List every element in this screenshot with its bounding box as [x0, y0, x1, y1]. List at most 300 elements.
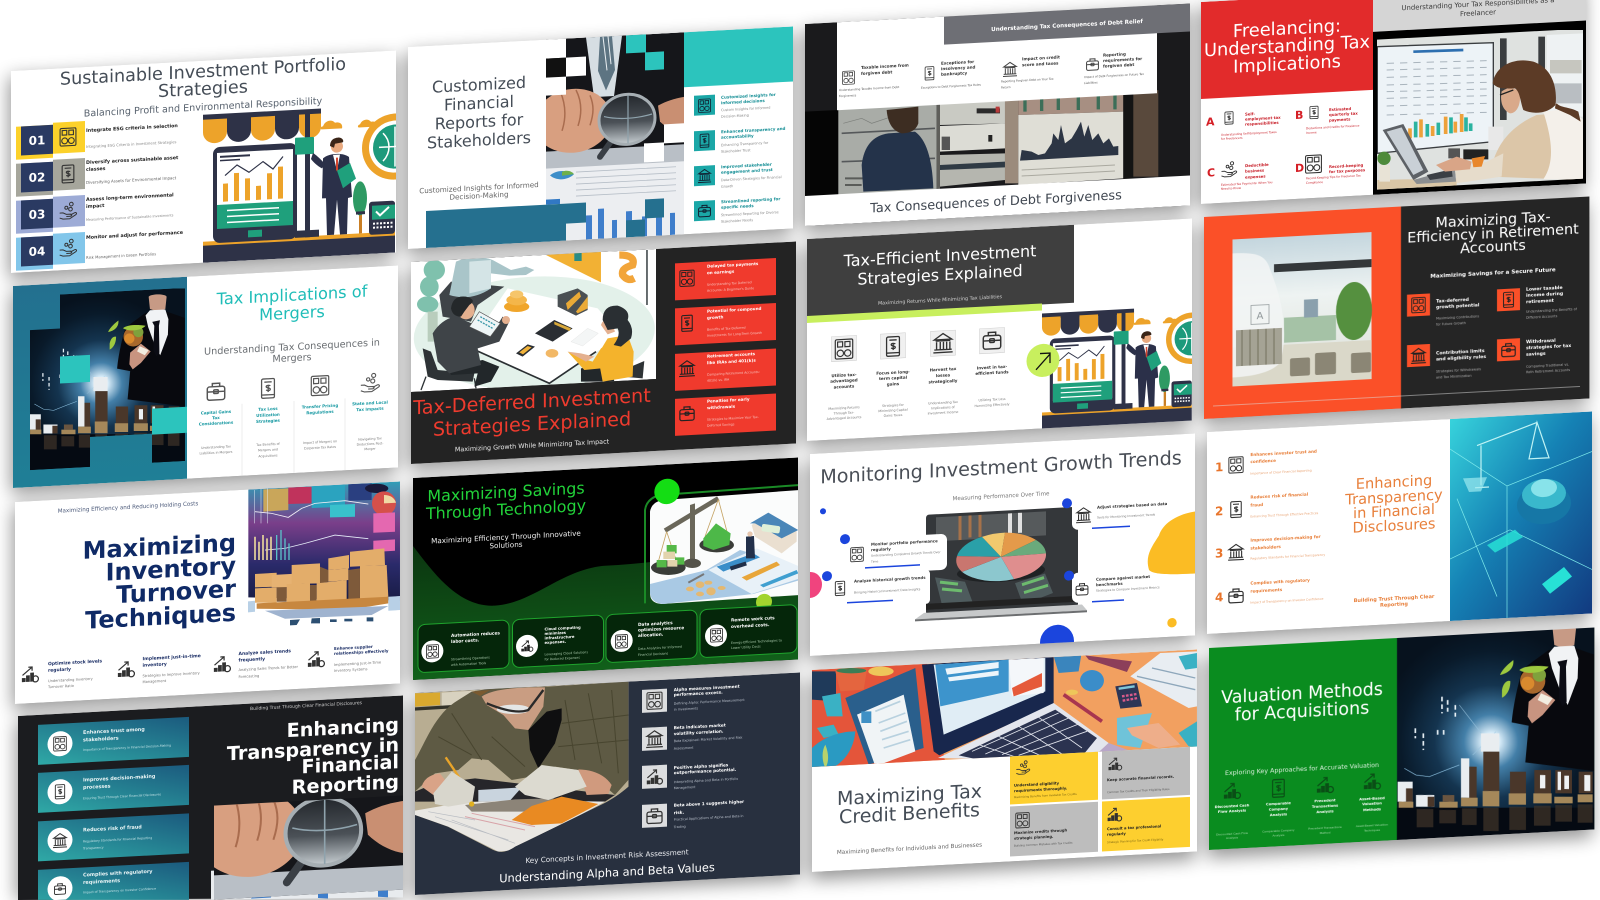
column: Capital Gains: Capital Gains	[201, 409, 232, 415]
slide: Valuation Methods for Acquisitions	[1209, 607, 1600, 882]
title: Transparency in	[227, 733, 399, 765]
point 4	[642, 799, 745, 831]
item A: Self-	[1245, 111, 1255, 117]
lime accent strip	[807, 303, 1042, 323]
white callout notches	[830, 499, 1092, 616]
item A	[1206, 111, 1280, 140]
item 01: Integrate ESG criteria in selection	[86, 123, 178, 134]
item 1: for Future Growth	[1436, 321, 1466, 327]
step 1: advantaged	[830, 377, 858, 384]
yellow tile: consult professional: Consult a tax professional	[1107, 824, 1161, 831]
benefit 1: Accounts: A Beginner's Guide	[707, 286, 754, 293]
subtitle: Understanding Tax Consequences in	[204, 337, 380, 358]
teal corner panel	[684, 26, 793, 87]
benefit card 2	[38, 765, 189, 813]
item 4: forgiven debt	[1103, 62, 1134, 69]
item 4: strategies for tax	[1526, 343, 1571, 351]
item 2	[921, 59, 981, 90]
subtitle: Building Trust Through Clear	[1354, 594, 1435, 604]
method 4: Techniques	[1363, 828, 1381, 833]
item A: Understanding Self-Employment Taxes	[1221, 130, 1277, 137]
tile 1	[418, 620, 509, 673]
item B: payments	[1329, 117, 1351, 123]
tile 2	[512, 615, 604, 668]
title: Reporting	[292, 770, 399, 799]
item 2	[694, 126, 786, 155]
point: monitor portfolio: Monitor portfolio performance	[871, 538, 938, 547]
column: Transfer Pricing: Regulations	[306, 409, 334, 415]
item 2: income during	[1526, 291, 1563, 299]
stepped photo: man with city	[23, 279, 192, 484]
item B: quarterly tax	[1329, 111, 1358, 117]
item B: Deductions and Credits for Freelance	[1306, 124, 1360, 130]
point: adjust strategies	[1076, 501, 1168, 530]
point 2: volatility correlation.	[674, 729, 724, 736]
item 4: Withdrawal	[1526, 338, 1556, 345]
slide: Tax Implications of Mergers	[13, 265, 398, 488]
point 2: Assessment	[674, 746, 694, 751]
step 1	[827, 335, 862, 421]
point 2: Beta Explained: Market Volatility and Risk	[674, 736, 742, 743]
slide: Enhancing Transparency in Financial Reporting	[18, 695, 416, 900]
item B: B	[1295, 109, 1303, 122]
tile 1: with Automation Tools	[451, 661, 487, 667]
green dot	[654, 478, 680, 505]
method 1: Discounted Cash	[1215, 803, 1250, 809]
item 4: savings	[1526, 351, 1546, 358]
point: monitor portfolio: regularly	[871, 546, 891, 552]
tile 4: Energy-Efficient Technologies to	[731, 638, 782, 645]
gray tile: strategic planning: strategic planning.	[1014, 835, 1054, 841]
subtitle: Customized Insights for Informed	[419, 180, 539, 195]
step 1: Advantaged Accounts	[827, 415, 862, 421]
method 2: Comparable	[1266, 801, 1291, 806]
item 2: accountability	[721, 133, 754, 140]
point 3	[642, 761, 738, 792]
tip 3	[214, 648, 298, 680]
step 1: Maximizing Returns	[828, 405, 860, 411]
item 3: engagement and trust	[721, 167, 773, 175]
item 4: Complies with regulatory	[1250, 578, 1310, 586]
item 2: insolvency and	[941, 64, 976, 71]
method 4: Asset-Based Valuation	[1356, 822, 1388, 828]
item C	[1208, 161, 1272, 190]
benefit 2: Investments for Long-Term Growth	[707, 331, 762, 338]
slide: Enhancing Transparency in Financial Disclosures	[1207, 411, 1592, 634]
benefit 1: Understanding Tax Deferred	[707, 280, 752, 287]
item 1: Understanding Taxable Income from Debt	[839, 85, 900, 92]
benefit 1	[675, 258, 776, 300]
item 3: and Tax Minimization	[1436, 374, 1472, 380]
item 4: requirements for	[1103, 56, 1142, 63]
column: Transfer Pricing: Transfer Pricing	[302, 403, 338, 410]
tile 3	[606, 610, 697, 663]
yellow tile: consult professional	[1102, 797, 1190, 852]
tip 3: frequently	[238, 656, 265, 664]
tip 3: Forecasting	[238, 674, 259, 679]
subtitle: Measuring Performance Over Time	[953, 491, 1050, 502]
title: Maximizing Tax	[837, 780, 982, 810]
image: laptop with pie chart	[915, 506, 1087, 621]
photo: analyst examining map with gloves	[415, 668, 648, 872]
orange panel	[1204, 206, 1401, 419]
benefit card 4: Complies with regulatory	[83, 869, 153, 879]
column: Capital Gains: Liabilities in Mergers	[200, 450, 233, 456]
step 4	[974, 327, 1010, 408]
subtitle: Maximizing Benefits for Individuals and Businesses	[837, 842, 982, 856]
item 03	[16, 190, 174, 234]
benefit 2	[675, 303, 776, 345]
benefit 2: growth	[707, 314, 723, 320]
method 4: Asset-Based	[1359, 796, 1385, 801]
yellow tile: eligibility: Understand eligibility	[1014, 781, 1060, 788]
gray tile: strategic planning	[1010, 802, 1098, 856]
title: Tax Implications of	[216, 282, 369, 309]
tile 3: Data Analytics for Informed	[638, 645, 682, 651]
column dividers	[242, 398, 345, 476]
method 3: Precedent Transactions	[1308, 825, 1342, 831]
benefit 3: like IRAs and 401(k)s	[707, 358, 756, 365]
item 3: Improved stakeholder	[721, 162, 772, 169]
gray tile: strategic planning: Maximize credits through	[1014, 828, 1067, 835]
benefit 1: on earnings	[707, 269, 735, 275]
title: for Acquisitions	[1235, 698, 1369, 726]
tile 3: Financial Decisions	[638, 651, 669, 657]
title: Turnover	[116, 575, 236, 609]
benefit 2: Potential for compound	[707, 306, 761, 314]
subtitle: Maximizing Growth While Minimizing Tax Impact	[455, 437, 610, 454]
tip 1: regularly	[48, 667, 71, 674]
item 3	[1215, 534, 1325, 563]
header text: Freelancer	[1460, 8, 1496, 18]
item 2: 2	[1215, 504, 1223, 519]
point: monitor portfolio: Time	[870, 559, 878, 564]
step 3	[928, 330, 958, 416]
title: Tax-Deferred Investment	[412, 384, 651, 419]
subtitle: Decision-Making	[449, 190, 509, 202]
item 3: and eligibility rules	[1436, 354, 1486, 363]
benefit 2: Benefits of Tax-Deferred	[707, 326, 746, 332]
method 1	[1215, 783, 1250, 841]
item 3: score and taxes	[1022, 60, 1059, 67]
step 2: term capital	[879, 375, 908, 381]
item 4: specific needs	[721, 203, 754, 210]
title: Through Technology	[425, 496, 586, 523]
subtitle: Building Trust Through Clear Financial Disclosures	[250, 700, 363, 712]
column: Tax Loss: Acquisitions	[258, 453, 278, 458]
title: Strategies	[158, 77, 248, 102]
point 3: Management	[674, 785, 696, 790]
item 04	[16, 227, 184, 271]
item 1	[839, 62, 909, 98]
item B: Income	[1306, 130, 1317, 135]
item 3: stakeholders	[1250, 544, 1281, 551]
dark teal footer block	[426, 204, 566, 248]
subtitle: Maximizing Efficiency Through Innovative	[431, 529, 581, 546]
item 4: Liabilities	[1084, 80, 1098, 85]
item 3	[694, 162, 782, 188]
item 04: Risk Management in Green Portfolios	[86, 251, 156, 260]
item 4: requirements	[1250, 587, 1283, 594]
tip 4: Inventory Systems	[334, 667, 368, 673]
item 4: Streamlined reporting for	[721, 196, 780, 204]
subtitle: Key Concepts in Investment Risk Assessment	[525, 847, 689, 865]
dark header band	[807, 225, 1074, 317]
column: State and Local	[352, 373, 389, 452]
column: Tax Loss: Strategies	[256, 418, 281, 424]
title: Credit Benefits	[839, 799, 980, 829]
tip 2: Management	[142, 679, 167, 684]
column: Tax Loss	[255, 378, 281, 459]
column: State and Local: Navigating Tax	[358, 436, 382, 442]
tile 2: expenses.	[544, 639, 567, 645]
title: Monitoring Investment Growth Trends	[820, 446, 1182, 488]
item 2: Lower taxable	[1526, 285, 1563, 293]
slide: Freelancing: Understanding Tax Implications	[1201, 0, 1590, 211]
tip 2	[118, 653, 201, 685]
method 4	[1356, 773, 1388, 833]
photo: savings jar by window: A	[1257, 311, 1264, 322]
step 3: Implications of	[931, 405, 956, 410]
tip 2: inventory	[142, 661, 167, 669]
point: analyze historical: Bringing Historical Investment Data Insights	[854, 587, 921, 595]
item 4: Comparing Traditional vs.	[1526, 363, 1569, 369]
item 02: Diversifying Assets for Environmental Impact	[86, 175, 177, 185]
item 1: Maximizing Contributions	[1436, 314, 1479, 321]
step 1: Utilize tax-	[831, 372, 857, 378]
method 2: Analysis	[1272, 833, 1285, 838]
method 4: Valuation	[1362, 801, 1382, 806]
method 3: Analysis	[1316, 809, 1334, 814]
step 2: Focus on long-	[876, 369, 910, 376]
method 3	[1308, 777, 1342, 836]
gray tile: strategic planning: Building Common Mistakes with Tax Credits	[1014, 841, 1073, 848]
footer band with title: Tax Consequences of Debt Forgiveness	[869, 188, 1122, 217]
item 2: retirement	[1526, 298, 1555, 305]
item C: expenses	[1245, 174, 1266, 180]
column: Tax Loss: Mergers and	[258, 447, 278, 452]
title: Understanding Alpha and Beta Values	[499, 860, 715, 886]
tip 4	[308, 643, 389, 674]
title: Maximizing Tax-	[1435, 210, 1551, 232]
item 1: Forgiveness	[839, 93, 857, 98]
point: compare benchmarks: benchmarks	[1096, 581, 1123, 587]
column: Transfer Pricing: Corporate Tax Rates	[304, 445, 336, 450]
benefit 3: 401(k) vs. IRA	[707, 377, 730, 383]
title: Customized	[432, 73, 526, 97]
title: Strategies Explained	[857, 261, 1023, 289]
lime dot	[756, 593, 772, 610]
method 2: Comparable Company	[1262, 828, 1295, 834]
point 1: in Investments	[674, 706, 698, 712]
subtitle: Maximizing Efficiency and Reducing Holding Costs	[58, 501, 198, 515]
point 4: risk.	[674, 810, 684, 815]
tile 3: allocation.	[638, 632, 664, 639]
item 1: Tax-deferred	[1436, 297, 1469, 305]
tile 1: Streamlining Operations	[451, 655, 490, 661]
item C: Estimated Tax Payments: When You	[1221, 180, 1273, 187]
item D: Record-Keeping Tips for Freelance Tax	[1306, 173, 1361, 180]
title: Efficiency in Retirement	[1407, 222, 1579, 247]
item 1: confidence	[1250, 458, 1276, 464]
benefit card 3	[38, 813, 189, 861]
image: balance scale with house and coins	[645, 477, 800, 612]
item 3: Growth	[721, 184, 733, 189]
title: Sustainable Investment Portfolio	[60, 55, 346, 90]
tile 2: for Reduced Expenses	[544, 656, 580, 661]
item A: A	[1206, 115, 1215, 129]
yellow tile: eligibility: requirements thoroughly.	[1014, 786, 1068, 793]
subtitle: Exploring Key Approaches for Accurate Valuation	[1225, 762, 1379, 777]
point 4: Trading	[673, 825, 686, 829]
red title panel	[1201, 0, 1373, 99]
title: Financial	[444, 92, 514, 115]
item 3: Return	[1001, 85, 1011, 90]
step 4: Harvesting Effectively	[974, 402, 1010, 408]
illustration: people at table	[411, 237, 658, 409]
item B	[1296, 106, 1360, 134]
item 3: Regulatory Standards for Financial Transparency	[1250, 553, 1325, 561]
tile 2: Leveraging Cloud Solutions	[544, 650, 588, 656]
item 4: Roth Retirement Accounts	[1526, 368, 1570, 374]
slide: Tax-Efficient Investment Strategies Explained	[807, 217, 1218, 441]
title: Mergers	[259, 302, 325, 324]
item 03: impact	[86, 203, 105, 210]
title: in Financial	[1353, 501, 1435, 522]
item 1: forgiven debt	[861, 69, 892, 76]
tile 3: optimizes resource	[638, 625, 684, 634]
benefit card 1: stakeholders	[83, 736, 119, 744]
benefit 3: Retirement accounts	[707, 351, 756, 359]
item 4	[1215, 577, 1324, 607]
column: Transfer Pricing	[302, 375, 338, 451]
slide: Sustainable Investment Portfolio Strategies	[11, 49, 428, 273]
title: Maximizing	[83, 529, 236, 565]
point 4: Practical Applications of Alpha and Beta in	[674, 814, 744, 822]
subtitle: Maximizing Returns While Minimizing Tax Liabilities	[878, 294, 1003, 307]
item 2	[1215, 491, 1319, 521]
step 3: Understanding Tax	[928, 400, 958, 406]
benefit card 3: Reduces risk of fraud	[83, 824, 142, 834]
point: analyze historical: Analyze historical growth trends	[854, 575, 926, 584]
item 2	[1497, 284, 1578, 321]
column: Tax Loss: Tax Benefits of	[255, 442, 281, 447]
column: Transfer Pricing: Impact of Mergers on	[303, 439, 337, 445]
column: Tax Loss: Utilization	[256, 412, 280, 418]
item 3: Impact on credit	[1022, 54, 1060, 61]
benefit 4: Penalties for early	[707, 396, 750, 404]
tile 4: Lower Utility Costs	[731, 644, 761, 650]
item 3: 3	[1215, 546, 1223, 561]
subtitle: Maximizing Savings for a Secure Future	[1430, 267, 1556, 280]
yellow tile: consult professional: Strategic Planning for Tax Credit Eligibility	[1107, 837, 1164, 844]
step 3: Harvest tax	[930, 366, 957, 372]
point: monitor portfolio	[851, 538, 941, 569]
step 3: Investment Income	[928, 410, 958, 416]
step 2: Minimizing Capital	[878, 408, 908, 413]
footer band with title	[805, 175, 1190, 226]
column: Capital Gains: Tax	[212, 415, 220, 420]
benefit 4: Strategies to Maximize Your Tax-	[707, 415, 759, 422]
benefit card 2: Ensuring Trust Through Clear Financial Disclosures	[83, 792, 161, 801]
slide: Maximizing Tax Credit Benefits	[812, 627, 1197, 872]
benefit card 3: Regulatory Standards for Financial Reporting	[83, 836, 152, 844]
column: State and Local: Deductions Post-	[357, 441, 383, 447]
item D: Compliance	[1306, 180, 1323, 185]
point: adjust strategies: Tools for Monitoring Investment Trends	[1096, 513, 1156, 520]
photo: woman at laptop	[1370, 18, 1590, 202]
method 2	[1262, 779, 1295, 838]
tile 2: Cloud computing	[544, 625, 581, 631]
turquoise accent squares	[60, 350, 187, 439]
column: Capital Gains: Considerations	[199, 420, 234, 427]
checkered overlay squares	[546, 32, 684, 242]
point 2: Beta indicates market	[674, 722, 726, 730]
yellow tile: consult professional: regularly	[1107, 832, 1126, 837]
subtitle: Reporting	[1380, 601, 1408, 609]
item 2: Understanding the Benefits of	[1526, 307, 1578, 314]
item 4	[1497, 335, 1571, 376]
numbered dots	[822, 498, 1074, 594]
benefit card 4	[38, 862, 189, 900]
item B: Estimated	[1329, 106, 1351, 112]
item D: Record-keeping	[1329, 162, 1364, 169]
tile 4: Remote work cuts	[731, 615, 775, 624]
item 2: Reduces risk of financial	[1250, 492, 1309, 500]
item 1	[694, 93, 776, 118]
title: Tax-Efficient Investment	[843, 241, 1036, 271]
item 04: 04	[29, 244, 45, 259]
title: Accounts	[1460, 238, 1526, 257]
item 4	[694, 197, 780, 223]
item 02: classes	[86, 166, 106, 173]
item 3: Contribution limits	[1436, 348, 1485, 357]
slide: Customized Financial Reports for Stakeholders	[408, 26, 793, 249]
tip 4: relationships effectively	[334, 648, 389, 656]
point 1: Alpha measures investment	[674, 684, 740, 692]
illustration: shop with tablet chart	[203, 108, 396, 263]
item 3: Reporting Forgiven Debt on Your Tax	[1001, 77, 1054, 84]
title: Disclosures	[1352, 515, 1436, 537]
tip 2: Implement just-in-time	[142, 653, 201, 662]
item 04: Monitor and adjust for performance	[86, 230, 184, 241]
item C: C	[1207, 166, 1215, 180]
illustration: laptop and calculator on desk	[812, 627, 1197, 792]
photo: man with city skyline	[1389, 607, 1600, 873]
tip 1	[22, 658, 102, 691]
item 1: growth potential	[1436, 302, 1480, 311]
white panel	[837, 5, 1157, 110]
benefit card 3: Transparency	[82, 845, 104, 851]
method 3: Precedent	[1314, 798, 1336, 803]
item 2: Stakeholder Trust	[721, 148, 751, 154]
subtitle: Solutions	[489, 540, 523, 550]
benefit 4	[675, 394, 776, 436]
column: State and Local: State and Local	[352, 399, 389, 406]
title: Implications	[1233, 51, 1341, 78]
item 3: Data-Driven Strategies for Financial	[721, 175, 782, 182]
tip 4: Implementing Just-in-Time	[334, 660, 382, 667]
point: compare benchmarks	[1076, 573, 1160, 603]
item A: responsibilities	[1245, 120, 1279, 127]
item 3	[1407, 341, 1486, 381]
item 1	[1215, 449, 1317, 478]
item 4: Impact of Transparency on Investor Confidence	[1250, 597, 1324, 605]
item 2: Enhancing Transparency for	[721, 141, 769, 147]
item 1: Custom Insights for Informed	[721, 106, 770, 112]
point 1: performance excess.	[674, 690, 723, 697]
item 3: Strategies for Withdrawals	[1436, 367, 1481, 374]
